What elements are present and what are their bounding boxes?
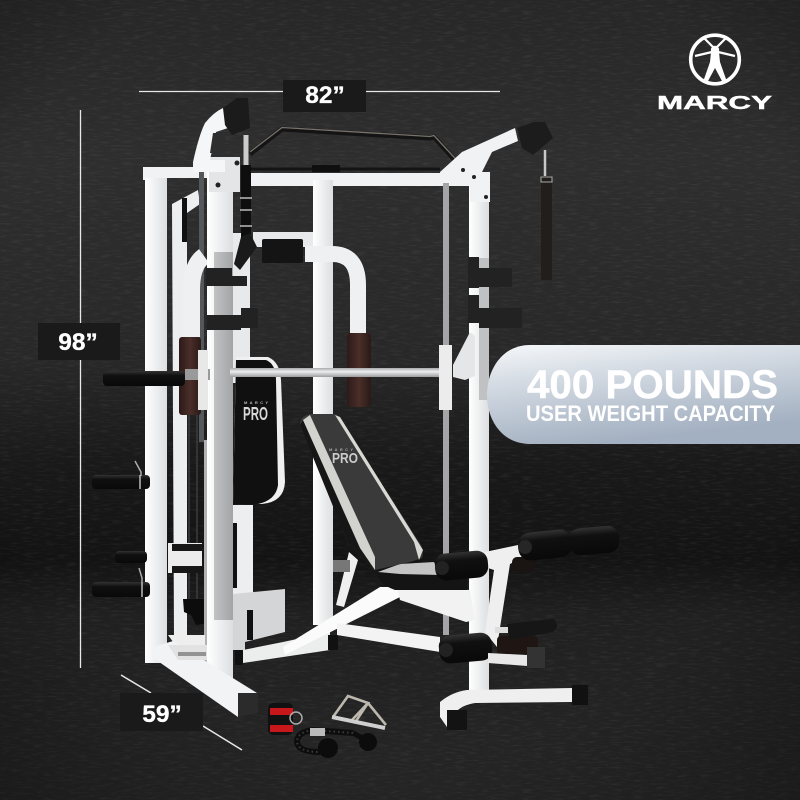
cable and weight parts: [168, 400, 205, 646]
adjustable bench: MARCY: [329, 447, 353, 452]
smith machine frame: [92, 98, 553, 717]
guide rods: [443, 183, 449, 635]
dimension: height 98 inches: 98”: [58, 329, 98, 356]
right hooks: [468, 257, 522, 328]
dimension: depth 59 inches: 59”: [142, 701, 182, 728]
vertical back pad: MARCY: [244, 400, 268, 405]
left cable strap and handle: [234, 135, 257, 270]
base plate: [233, 589, 285, 650]
right cable strap: [541, 150, 552, 280]
weight storage pegs: [92, 461, 150, 597]
icon: v handle: [332, 696, 386, 728]
pec pads: [262, 239, 303, 263]
top rail: [250, 168, 440, 170]
icon: rope handle: [297, 728, 377, 758]
callout: weight capacity: [487, 345, 800, 444]
leg rollers and levers: [485, 545, 522, 647]
left arm and pulley: [193, 108, 231, 172]
icon: ankle strap: [268, 703, 302, 735]
accessories: [268, 696, 386, 758]
right post and arm: [469, 185, 489, 690]
lat bar: [250, 129, 464, 170]
dimension: width 82 inches: [139, 80, 500, 112]
vertical back pad: PRO: [243, 404, 268, 424]
bench front base: [488, 653, 527, 666]
smith bar: [103, 350, 445, 410]
front foot: [152, 641, 257, 717]
bench support legs: [336, 552, 358, 607]
post top plate: [209, 157, 240, 192]
floor base frame: [243, 632, 330, 663]
incline back pad: [300, 414, 423, 570]
dimension: height 98 inches: [38, 110, 120, 668]
adjustable bench: [283, 414, 620, 730]
dimension: depth 59 inches: [120, 675, 242, 750]
back frame: [143, 167, 472, 663]
left safety hooks: [206, 268, 258, 330]
dimension: width 82 inches: 82”: [305, 82, 345, 109]
vertical back pad: [233, 357, 285, 504]
callout: weight capacity: 400 POUNDS: [527, 363, 778, 407]
right carriage: [453, 332, 475, 380]
logo: Marcy: [657, 35, 772, 113]
right pulley: [517, 122, 553, 155]
logo: Marcy: MARCY: [657, 93, 772, 113]
callout: weight capacity: USER WEIGHT CAPACITY: [526, 401, 775, 426]
adjustable bench: PRO: [332, 450, 358, 467]
seat pad: [378, 562, 467, 590]
arched pec frame: [305, 254, 358, 335]
front left post: [207, 160, 233, 685]
